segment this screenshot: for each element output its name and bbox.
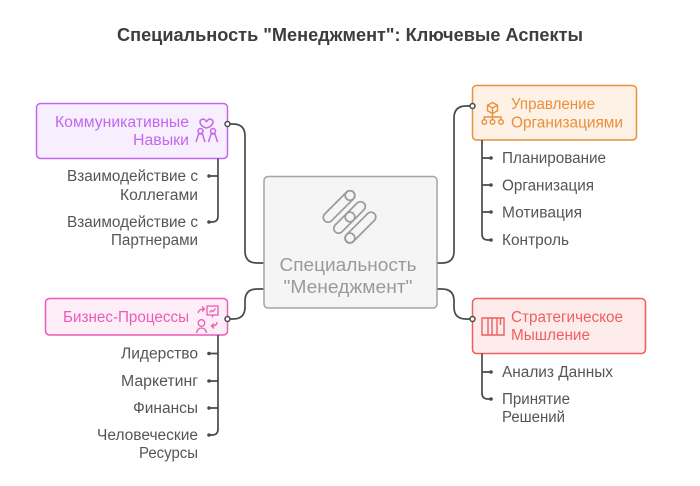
sub-branches: business processes: Человеческие (97, 427, 198, 444)
sub-branches: business processes: Финансы (133, 400, 198, 417)
icon: cube and hierarchy (482, 102, 503, 124)
sub-branches: organization management: Контроль (502, 232, 569, 249)
panel: strategic thinking (472, 298, 646, 354)
sub-branches: communication skills: Коллегами (120, 187, 198, 204)
connector: strategic thinking to center (437, 289, 472, 319)
icon: center capsules (321, 189, 378, 245)
heading: business processes: Бизнес-Процессы (63, 309, 189, 326)
sub-branches: business processes: Маркетинг (121, 373, 198, 390)
sub-branches: strategic thinking: Анализ Данных (502, 364, 613, 381)
panel: center topic: "Менеджмент" (284, 276, 412, 297)
sub-branches: business processes: Ресурсы (139, 445, 198, 462)
sub-branches: organization management (482, 140, 606, 249)
icon: two people with hearts (196, 119, 218, 142)
heading: organization management: Управление (511, 96, 595, 113)
panel: organization management (472, 86, 636, 140)
heading: strategic thinking: Мышление (511, 327, 590, 344)
panel: center topic (264, 176, 437, 308)
center label: Специальность (280, 254, 417, 275)
panel: business processes (46, 298, 228, 335)
connector: business processes to center (227, 289, 264, 319)
panel: communication skills (36, 104, 228, 158)
title: Специальность "Менеджмент": Ключевые Аспекты (117, 24, 583, 45)
sub-branches: strategic thinking: Принятие (502, 391, 570, 408)
heading: communication skills: Навыки (133, 132, 189, 149)
connector: organization to center (437, 106, 472, 263)
sub-branches: organization management: Планирование (502, 150, 606, 167)
icon: person, chart and arrows (196, 306, 218, 333)
sub-branches: communication skills: Партнерами (111, 232, 198, 249)
heading: strategic thinking: Стратегическое (511, 309, 623, 326)
heading: organization management: Организациями (511, 114, 623, 132)
sub-branches: communication skills (67, 158, 218, 249)
heading: communication skills: Коммуникативные (55, 114, 189, 131)
sub-branches: business processes (97, 335, 218, 462)
sub-branches: communication skills: Взаимодействие с (67, 214, 198, 231)
icon: columns (482, 318, 504, 335)
sub-branches: strategic thinking: Решений (502, 409, 565, 426)
connector: communication to center (227, 124, 264, 263)
sub-branches: business processes: Лидерство (121, 346, 198, 362)
sub-branches: organization management: Организация (502, 178, 594, 194)
sub-branches: strategic thinking (482, 354, 613, 426)
connector endpoints (225, 104, 475, 322)
sub-branches: organization management: Мотивация (502, 204, 582, 222)
sub-branches: communication skills: Взаимодействие с (67, 168, 198, 185)
